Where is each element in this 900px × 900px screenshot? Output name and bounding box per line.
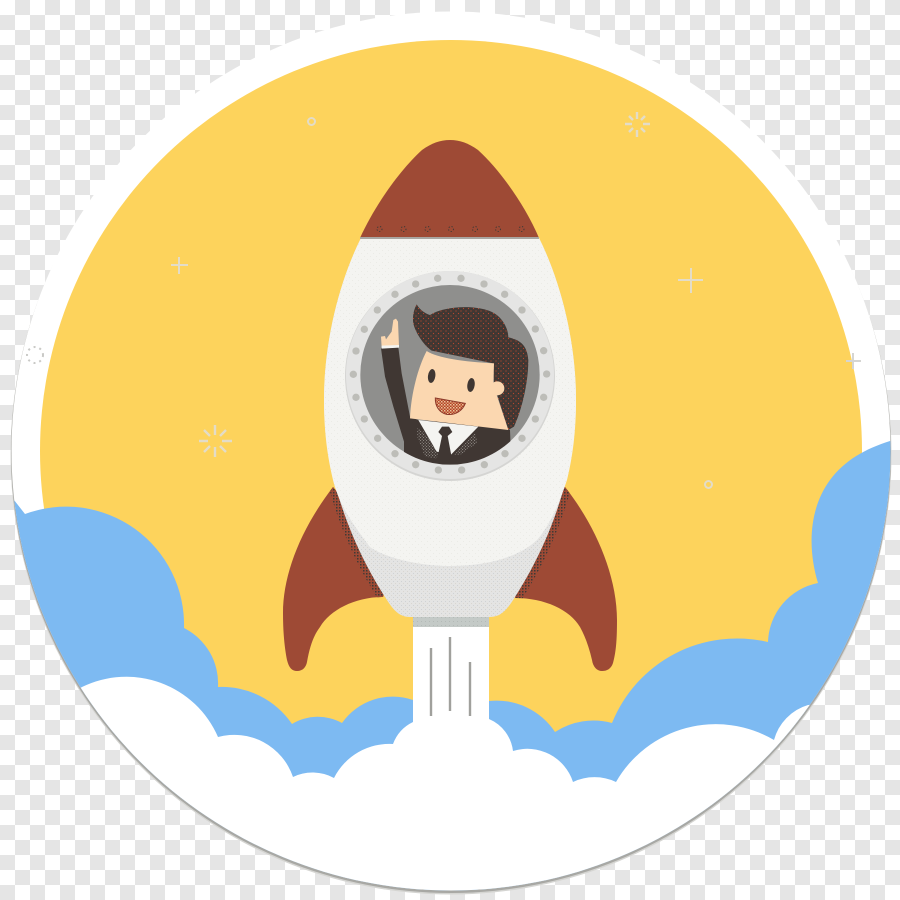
left eye [428, 369, 436, 383]
hair [413, 304, 528, 430]
pilot [381, 304, 528, 473]
porthole glass [360, 285, 540, 464]
suit stipple right [454, 433, 477, 455]
stars [27, 112, 861, 488]
nose base line [360, 237, 539, 239]
nose cone [360, 140, 539, 238]
right fin [505, 487, 617, 671]
suit stipple left [417, 428, 438, 458]
rocket body [324, 238, 576, 617]
blue clouds [0, 438, 900, 900]
fin shadow dots [330, 487, 570, 598]
porthole rim [345, 271, 555, 481]
shirt [418, 420, 478, 455]
porthole bolts [350, 275, 550, 474]
white clouds [80, 676, 810, 890]
porthole ring [346, 271, 554, 479]
right eye [467, 378, 475, 392]
porthole and pilot [350, 275, 550, 474]
face [410, 351, 508, 430]
mouth [435, 398, 465, 415]
body highlight [324, 238, 576, 566]
ear [493, 381, 504, 396]
suit [381, 347, 512, 473]
rocket [283, 140, 617, 671]
cuff [382, 345, 399, 349]
hand [381, 319, 399, 347]
rocket jet [413, 617, 489, 732]
tie [438, 426, 452, 455]
nose rivets [377, 226, 524, 232]
left fin [283, 487, 395, 671]
